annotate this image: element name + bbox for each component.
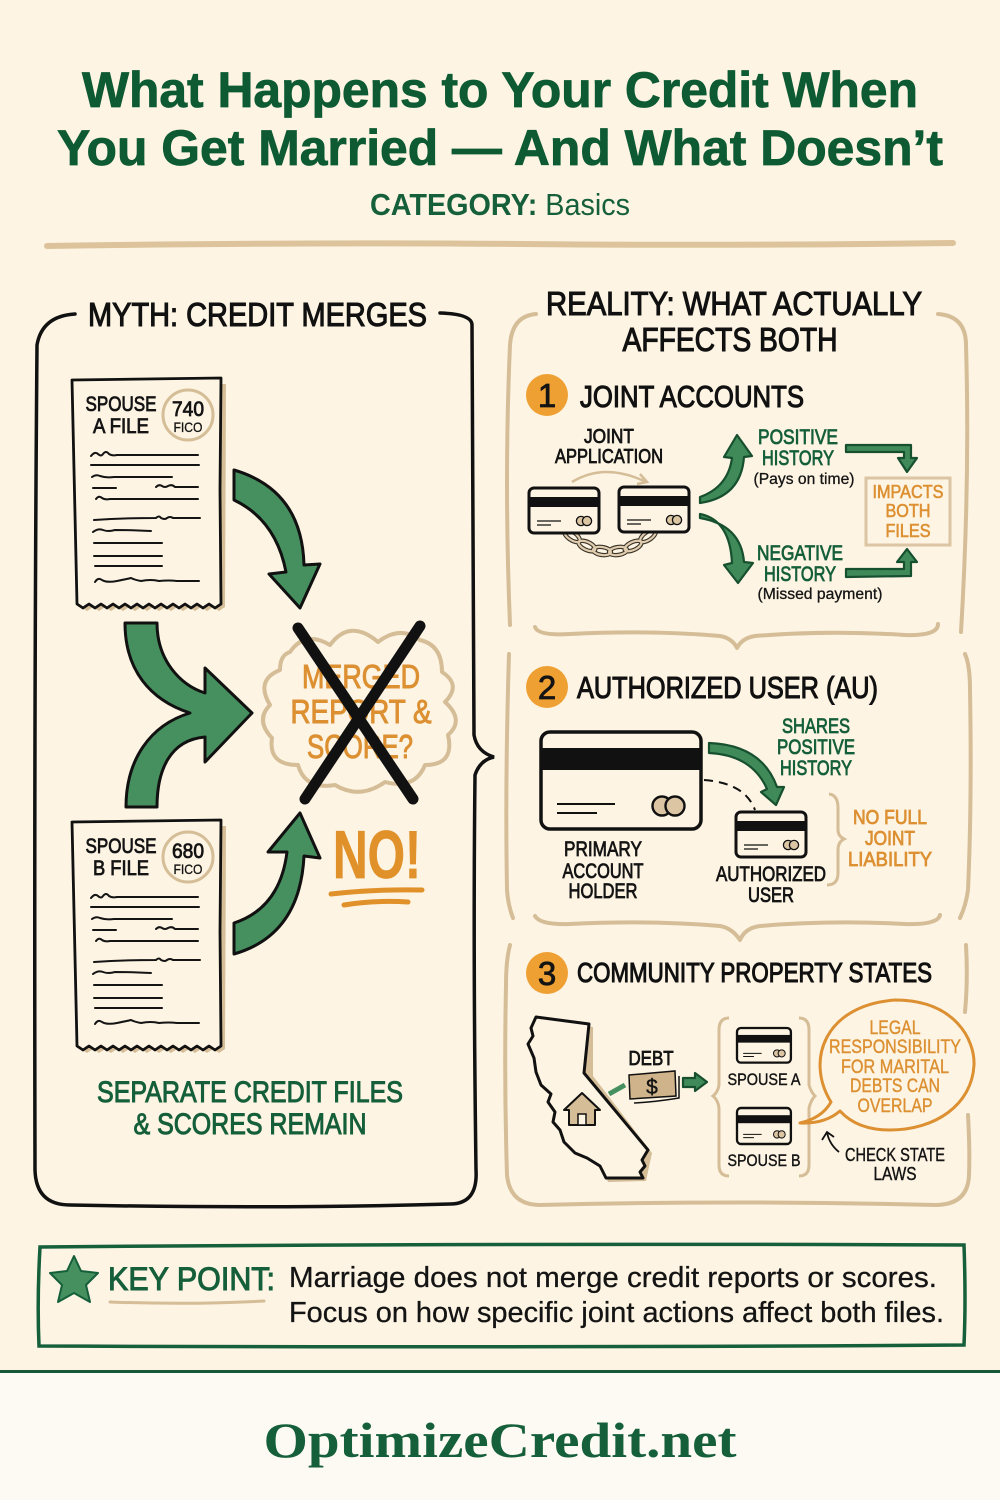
title	[57, 62, 943, 176]
panel 3 outline	[505, 945, 969, 1205]
divider	[47, 243, 953, 246]
heading: joint accounts: JOINT ACCOUNTS	[580, 379, 804, 414]
icon: money: $	[646, 1076, 658, 1099]
merged report cloud crossed out: SCORE?	[307, 728, 413, 765]
document: spouse A: 740	[172, 398, 204, 421]
badge 1	[526, 374, 568, 416]
authorized user label: USER	[748, 884, 794, 907]
badge 2: 2	[538, 669, 556, 706]
no full joint liability	[848, 807, 932, 871]
negative history: HISTORY	[764, 563, 836, 586]
arrow: both files merging	[125, 623, 252, 807]
primary account holder label	[562, 838, 644, 903]
reality heading: AFFECTS BOTH	[622, 321, 838, 358]
callout: legal responsibility: FOR MARITAL	[841, 1057, 949, 1078]
shares positive history: SHARES	[782, 715, 850, 738]
key point text	[289, 1262, 944, 1329]
primary account holder label: ACCOUNT	[562, 860, 644, 883]
positive history: POSITIVE	[758, 426, 838, 449]
authorized user label: AUTHORIZED	[716, 863, 826, 886]
key point text: Focus on how specific joint actions affect both files.	[289, 1297, 944, 1329]
document: spouse A: SPOUSE	[86, 393, 156, 416]
panel 2 outline	[506, 654, 971, 940]
badge 2	[526, 666, 568, 708]
arrow: negative to impacts	[846, 549, 917, 577]
key point text: Marriage does not merge credit reports or scores.	[289, 1262, 937, 1294]
shares positive history: POSITIVE	[777, 736, 855, 759]
arrow: spouse A to merged	[234, 470, 320, 608]
callout: legal responsibility	[800, 1000, 974, 1130]
conclusion text	[97, 1076, 403, 1141]
key point label: KEY POINT:	[108, 1261, 275, 1297]
arrow: positive to impacts	[846, 445, 917, 472]
arrow: debt	[683, 1073, 707, 1091]
check state laws: CHECK STATE	[845, 1145, 945, 1165]
arrow: shares history	[709, 743, 784, 805]
panel: reality	[505, 285, 974, 1205]
conclusion text: SEPARATE CREDIT FILES	[97, 1076, 403, 1109]
icon: house	[564, 1093, 600, 1125]
spouse cards with braces	[713, 1018, 815, 1176]
badge 3: 3	[538, 955, 556, 992]
merged report cloud crossed out	[263, 626, 456, 799]
positive history: HISTORY	[762, 447, 834, 470]
check state laws: LAWS	[874, 1164, 916, 1184]
title: What Happens to Your Credit When	[82, 62, 918, 118]
dashed link	[704, 780, 755, 810]
heading: authorized user: AUTHORIZED USER (AU)	[577, 670, 878, 705]
badge 3	[526, 952, 568, 994]
arrow: spouse B to merged	[234, 813, 320, 954]
conclusion text: & SCORES REMAIN	[134, 1108, 366, 1141]
impacts both files box: FILES	[886, 521, 930, 541]
reality heading	[546, 285, 922, 358]
NO callout	[331, 817, 422, 905]
joint application label: APPLICATION	[555, 446, 663, 468]
check state laws	[845, 1145, 945, 1184]
no full joint liability: NO FULL	[853, 807, 927, 829]
panel: joint accounts	[507, 314, 967, 648]
document: spouse A: A FILE	[93, 415, 149, 438]
arrow: check state laws	[822, 1132, 839, 1152]
panel: community property	[505, 945, 974, 1205]
shares positive history	[777, 715, 855, 780]
positive history: (Pays on time)	[754, 471, 854, 488]
no full joint liability: LIABILITY	[848, 849, 932, 871]
icon: star	[50, 1256, 98, 1302]
primary account holder label: PRIMARY	[564, 838, 642, 861]
document: spouse B	[72, 820, 226, 1053]
negative history: NEGATIVE	[757, 542, 843, 565]
negative history: (Missed payment)	[758, 586, 882, 603]
positive history	[754, 426, 854, 488]
joint application label: JOINT	[584, 426, 634, 448]
reality heading: REALITY: WHAT ACTUALLY	[546, 285, 922, 322]
spouse cards with braces: SPOUSE B	[728, 1151, 800, 1170]
myth heading: MYTH: CREDIT MERGES	[88, 296, 427, 333]
footer	[0, 1370, 1000, 1500]
document: spouse B: B FILE	[93, 857, 149, 880]
chained cards	[529, 487, 689, 556]
brace	[827, 794, 844, 885]
badge 1: 1	[538, 377, 556, 414]
callout: legal responsibility: RESPONSIBILITY	[829, 1037, 961, 1058]
document: spouse B: FICO	[174, 861, 203, 877]
arrow: negative	[700, 514, 753, 583]
document: spouse B: SPOUSE	[86, 835, 156, 858]
footer: OptimizeCredit.net	[264, 1412, 737, 1468]
icon: money	[609, 1071, 679, 1103]
panel: authorized user	[506, 654, 971, 940]
title: You Get Married — And What Doesn’t	[57, 120, 943, 176]
document: spouse A	[72, 378, 226, 611]
document: spouse B: 680	[172, 840, 204, 863]
shares positive history: HISTORY	[780, 757, 852, 780]
merged report cloud crossed out: MERGED	[302, 658, 420, 695]
impacts both files box: IMPACTS	[872, 482, 944, 502]
no full joint liability: JOINT	[865, 828, 915, 850]
arrow: positive	[700, 435, 752, 503]
spouse cards with braces: SPOUSE A	[728, 1070, 801, 1089]
primary card	[541, 732, 701, 829]
map: california	[528, 1017, 652, 1182]
panel: myth	[35, 296, 494, 1207]
primary account holder label: HOLDER	[568, 880, 638, 903]
callout: legal responsibility: LEGAL	[870, 1018, 920, 1039]
key point box	[38, 1244, 965, 1347]
joint application label	[555, 426, 663, 484]
impacts both files box	[866, 478, 950, 545]
negative history	[757, 542, 882, 603]
callout: legal responsibility: DEBTS CAN	[850, 1076, 940, 1097]
impacts both files box: BOTH	[886, 501, 930, 521]
authorized user card	[736, 812, 806, 857]
authorized user label	[716, 863, 826, 907]
callout: legal responsibility: OVERLAP	[858, 1096, 932, 1117]
panel 1 outline	[507, 314, 967, 648]
merged report cloud crossed out: REPORT &	[290, 693, 432, 730]
debt label: DEBT	[628, 1048, 674, 1070]
NO callout: NO!	[333, 817, 421, 893]
document: spouse A: FICO	[174, 419, 203, 435]
myth panel outline	[35, 313, 494, 1207]
category line: CATEGORY: Basics	[370, 187, 630, 222]
